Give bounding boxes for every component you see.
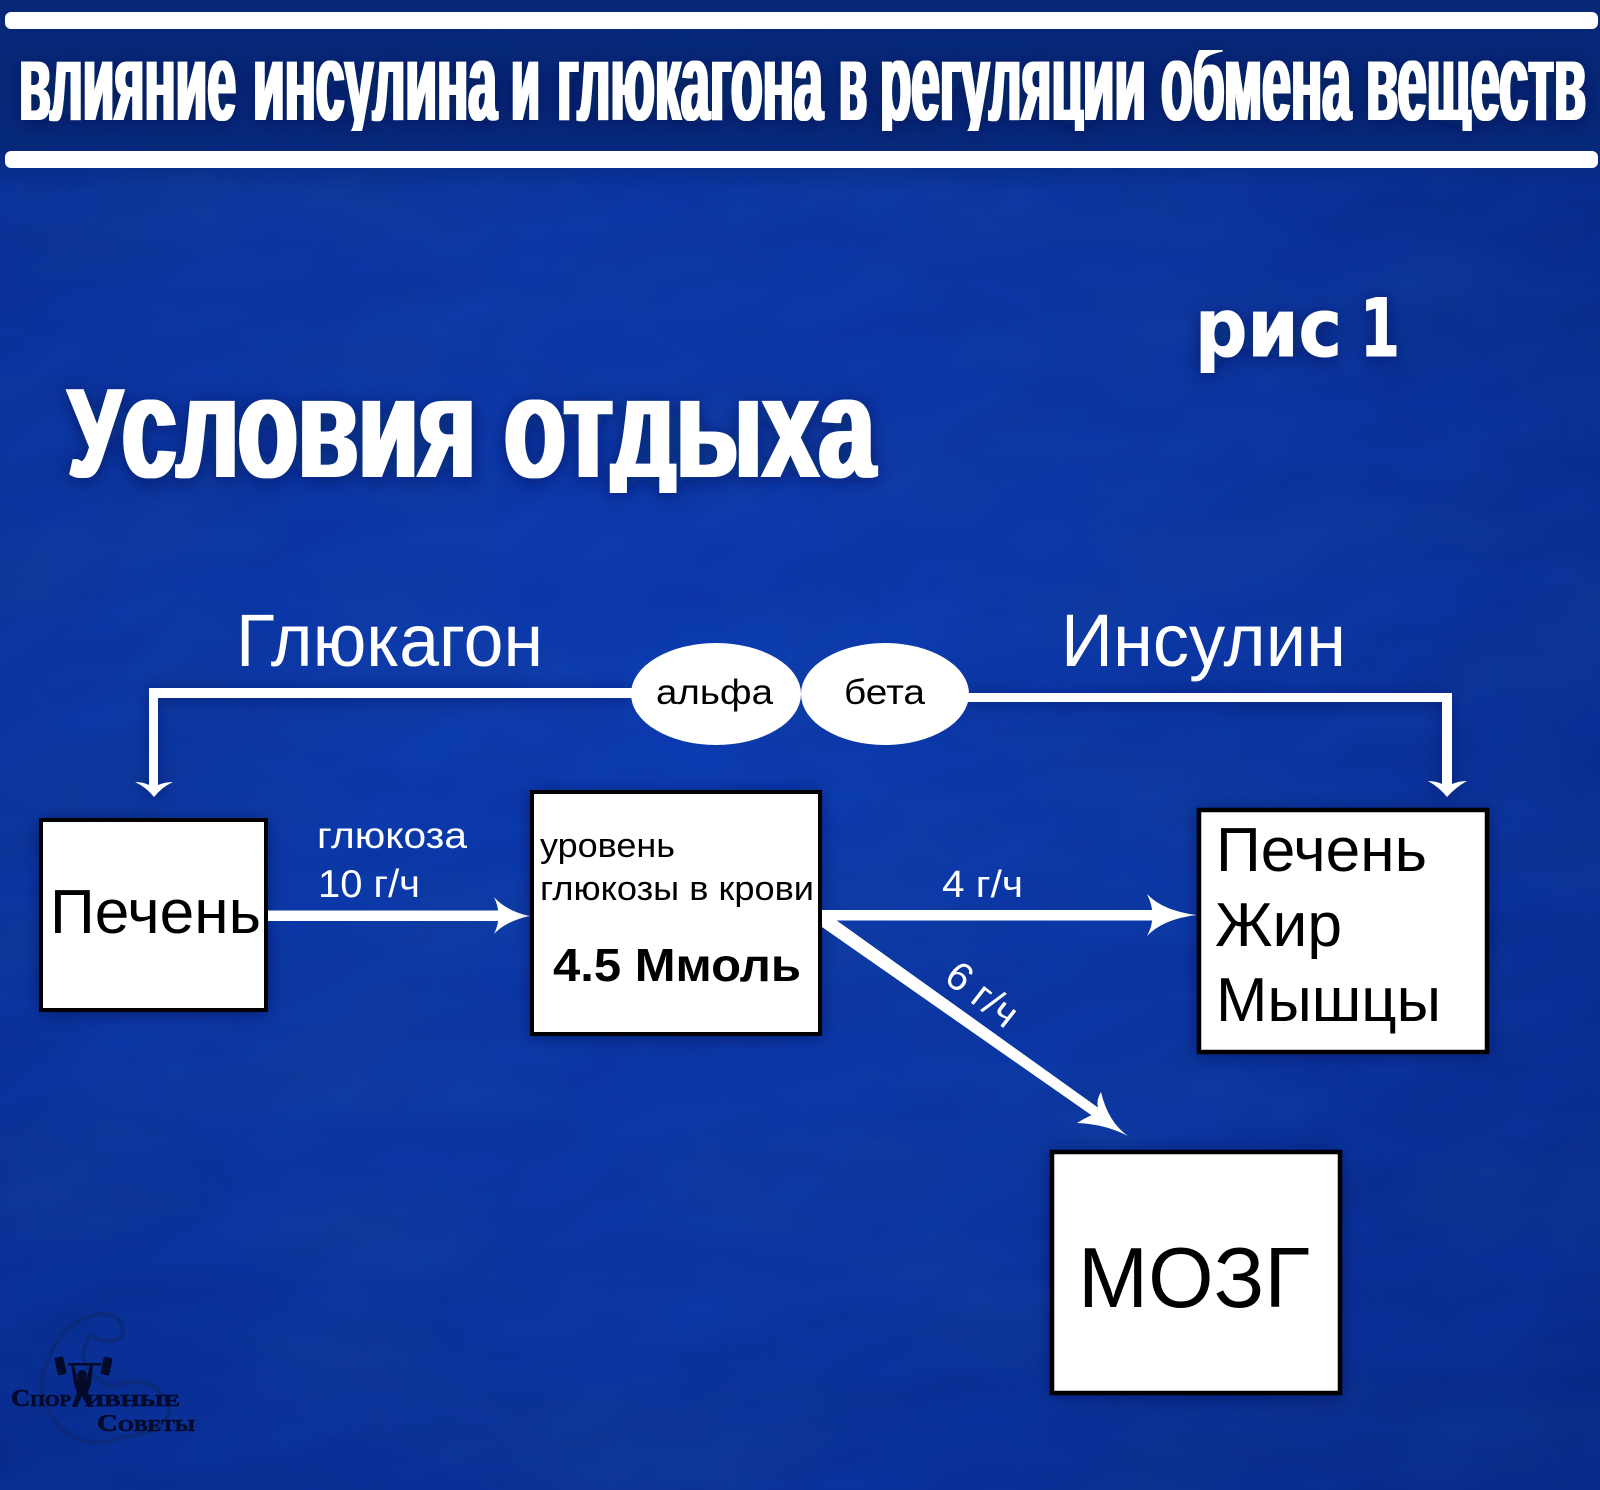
box: liver <box>41 820 266 1010</box>
box: brain: МОЗГ <box>1078 1231 1310 1326</box>
icon: weightlifter <box>54 1356 113 1407</box>
box: liver, fat, muscle <box>1199 810 1487 1052</box>
logo text: Спор т <box>11 1386 85 1412</box>
beta cell ellipse <box>801 643 969 745</box>
label: glucagon: Глюкагон <box>236 599 543 682</box>
main title: и <box>511 21 540 144</box>
alpha cell ellipse: альфа <box>656 673 774 712</box>
box: liver: Печень <box>50 878 261 947</box>
icon: flexed arm outline <box>42 1314 169 1443</box>
logo: sports advice <box>11 1314 195 1443</box>
label: 4 g/h: 4 г/ч <box>942 864 1023 906</box>
logo text <box>11 1386 195 1437</box>
beta cell ellipse: бета <box>844 673 926 712</box>
box: liver, fat, muscle: Печень <box>1216 816 1427 885</box>
main title <box>16 50 1589 136</box>
section heading: отдыха <box>504 347 876 508</box>
box: liver, fat, muscle: Мышцы <box>1216 966 1441 1035</box>
main title: обмена <box>1161 21 1351 144</box>
label: 6 g/h: 6 г/ч <box>937 953 1027 1037</box>
arrow: blood glucose to tissues <box>822 894 1197 936</box>
label: glucose 10 g/h: 10 г/ч <box>318 863 420 906</box>
bottom rule <box>5 151 1598 168</box>
main title: влияние <box>19 21 236 144</box>
main title: регуляции <box>880 21 1146 144</box>
box: blood glucose level: 4.5 Ммоль <box>553 939 801 991</box>
figure number: рис <box>1195 282 1342 375</box>
label: insulin: Инсулин <box>1061 599 1346 682</box>
alpha cell ellipse <box>631 643 801 745</box>
box: brain <box>1052 1152 1340 1393</box>
main title: в <box>839 21 867 144</box>
header: rules and main title <box>5 12 1598 168</box>
arrow: alpha cells to liver <box>135 688 632 797</box>
figure number: 1 <box>1360 282 1400 375</box>
arrow: liver to blood glucose <box>268 897 530 934</box>
section heading <box>62 386 884 503</box>
box: blood glucose level: глюкозы в крови <box>540 870 814 908</box>
logo text: ивные <box>85 1386 180 1412</box>
arrow: blood glucose to brain <box>822 920 1128 1136</box>
box: blood glucose level <box>532 792 820 1034</box>
section heading: Условия <box>68 347 476 508</box>
label: glucose 10 g/h: глюкоза <box>317 815 467 856</box>
label: glucose 10 g/h <box>317 815 467 906</box>
logo text: Советы <box>97 1411 195 1437</box>
box: liver, fat, muscle: Жир <box>1215 891 1342 960</box>
arrow: beta cells to tissues <box>965 693 1467 797</box>
main title: глюкагона <box>557 21 823 144</box>
main title: инсулина <box>253 21 497 144</box>
box: blood glucose level: уровень <box>540 827 675 865</box>
top rule <box>5 12 1598 29</box>
